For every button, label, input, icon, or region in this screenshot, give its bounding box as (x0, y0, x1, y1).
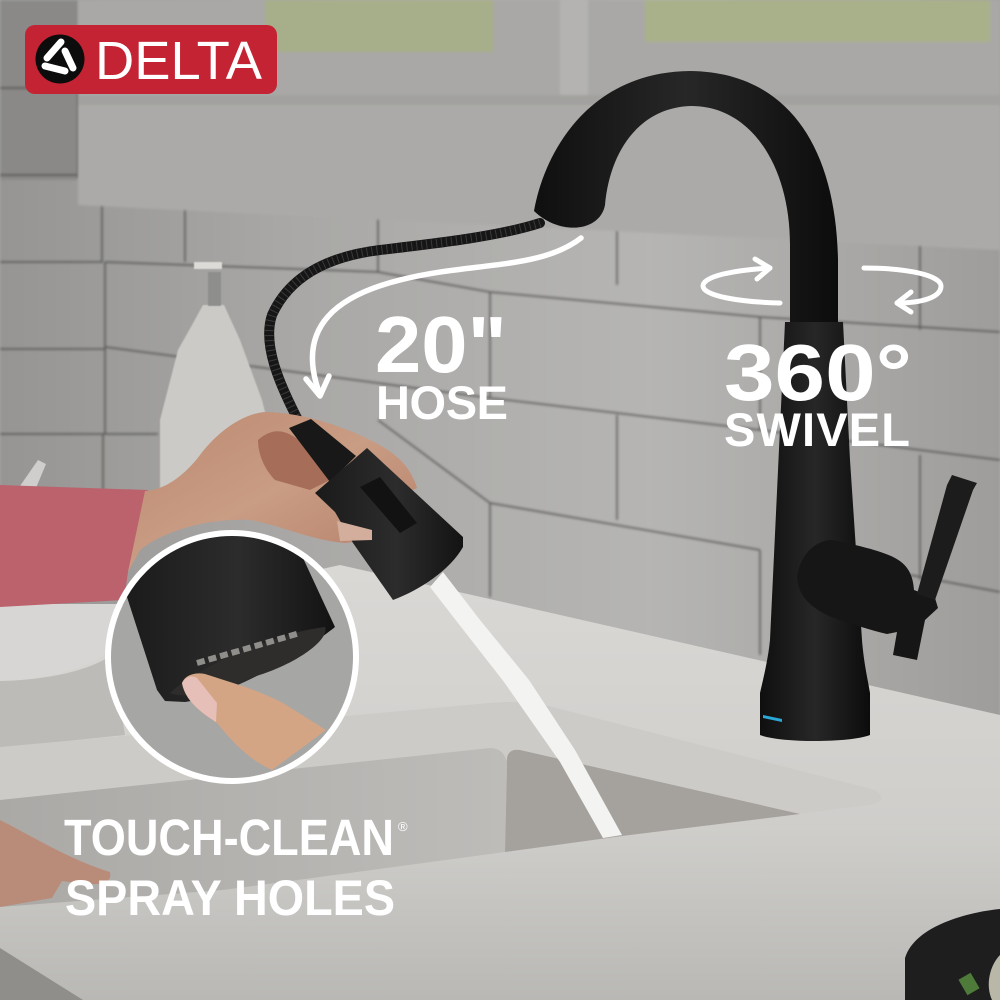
thumb nail (337, 521, 372, 541)
spray face (170, 627, 325, 695)
sweater sleeve (0, 485, 148, 607)
hand at lower left (0, 820, 110, 907)
sink: back basin wall (0, 748, 507, 907)
faucet (534, 71, 977, 741)
label: 360 degree swivel (724, 328, 912, 456)
hose connector (289, 419, 356, 482)
back of hand (128, 412, 417, 572)
faucet body (760, 322, 870, 741)
palm shadow (258, 431, 330, 490)
label: touch-clean spray holes: ® (398, 819, 408, 834)
label: touch-clean spray holes: TOUCH-CLEAN (64, 809, 394, 866)
logo: Delta (25, 25, 277, 94)
label: touch-clean spray holes (64, 809, 408, 926)
sink: rim bevel (0, 702, 881, 907)
background: countertop (0, 565, 1000, 1000)
faucet spout (534, 71, 838, 322)
background: upper window and shelf (78, 0, 1000, 250)
spray holes (197, 633, 300, 663)
faucet handle (797, 540, 938, 660)
water stream (430, 572, 622, 838)
logo icon (36, 34, 84, 84)
label: 20 inch hose: 20" (375, 300, 507, 389)
label: 20 inch hose (375, 300, 508, 429)
label: touch-clean spray holes: SPRAY HOLES (65, 870, 395, 926)
background: front counter corner (0, 948, 83, 1000)
label: 360 degree swivel: SWIVEL (724, 403, 910, 456)
bowl in lower right corner (905, 909, 1000, 1000)
hand holding sprayer (128, 412, 417, 572)
logo: Delta: DELTA (95, 31, 262, 91)
background: soap bottle (160, 262, 272, 500)
swivel arrows (703, 259, 941, 312)
hose arrow (306, 238, 581, 396)
spray head (289, 419, 463, 600)
status light (763, 715, 782, 722)
label: 20 inch hose: HOSE (376, 376, 508, 429)
label: 360 degree swivel: 360° (724, 328, 912, 417)
handle lever (917, 475, 977, 600)
background: utensil handle (20, 460, 46, 488)
background: counter left shadow (0, 655, 125, 748)
sprayer close-up (120, 530, 335, 702)
pull-out hose (269, 223, 540, 420)
fingertip (182, 673, 326, 770)
inset: touch-clean spray holes (108, 530, 356, 781)
spray button (360, 477, 417, 533)
fingernail (182, 676, 217, 722)
sprayer body (315, 448, 463, 600)
background: white bowl at left (0, 604, 125, 681)
sink: right basin wall (505, 750, 800, 852)
